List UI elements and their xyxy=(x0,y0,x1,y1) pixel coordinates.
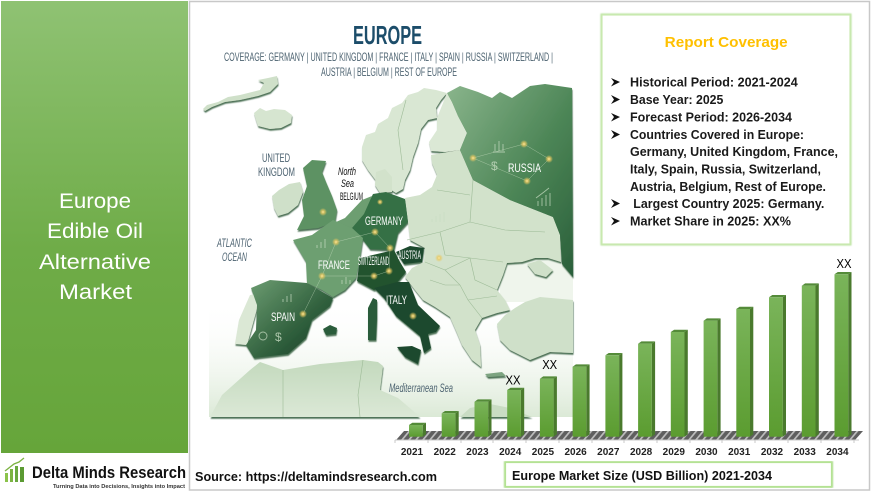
text: coverage subtitle xyxy=(224,50,553,79)
value labels: XX xyxy=(836,257,852,271)
heading: report coverage: Report Coverage xyxy=(665,34,788,51)
map labels: North xyxy=(338,166,356,178)
legend: chart caption box: Europe Market Size (USD Billion) 2021-2034 xyxy=(512,468,773,483)
United Kingdom xyxy=(297,160,337,230)
list: coverage items: Italy, Spain, Russia, Switzerland, xyxy=(630,162,821,176)
list: coverage items: Historical Period: 2021-2024 xyxy=(630,76,798,90)
Sardinia and Corsica xyxy=(368,298,377,340)
heading: market title: Edible Oil xyxy=(47,219,143,243)
Russia xyxy=(447,84,573,277)
panel: report coverage xyxy=(602,15,850,244)
year axis labels: 2032 xyxy=(761,447,784,458)
year axis labels: 2027 xyxy=(597,447,620,458)
list: coverage items: Countries Covered in Europe: xyxy=(630,128,804,142)
North Africa xyxy=(210,360,420,417)
year axis labels: 2030 xyxy=(695,447,718,458)
map labels: GERMANY xyxy=(365,214,403,228)
logo: Delta Minds Research: Turning Data into Decisions, Insights into Impact xyxy=(53,484,185,490)
Austria xyxy=(396,246,424,264)
Turkey xyxy=(497,297,573,360)
list: coverage items: Largest Country 2025: Germany. xyxy=(633,197,824,211)
value labels: XX xyxy=(542,358,558,372)
bar chart: market size 2021-2034 xyxy=(395,257,863,458)
year axis labels: 2033 xyxy=(794,447,816,458)
map labels: KINGDOM xyxy=(258,165,295,179)
value labels xyxy=(506,257,852,388)
glow dots xyxy=(299,140,553,320)
Norway and Sweden xyxy=(362,88,447,193)
Greenland sliver xyxy=(203,76,278,111)
list: coverage items: Forecast Period: 2026-2034 xyxy=(630,110,792,124)
year axis labels: 2031 xyxy=(728,447,751,458)
list: coverage items: Germany, United Kingdom, France, xyxy=(630,145,838,159)
map labels: FRANCE xyxy=(318,258,350,272)
map labels: SWITZERLAND xyxy=(358,254,389,268)
year axis labels: 2026 xyxy=(564,447,587,458)
Portugal xyxy=(235,294,258,345)
Levant shore xyxy=(460,404,532,417)
map labels: RUSSIA xyxy=(508,161,541,175)
icons: list arrow bullets xyxy=(611,78,620,226)
Finland xyxy=(429,93,467,152)
year axis labels: 2022 xyxy=(434,447,456,458)
map labels: UNITED xyxy=(262,151,290,165)
year axis labels: 2024 xyxy=(499,447,522,458)
year axis labels xyxy=(401,447,849,458)
map: Europe xyxy=(203,76,573,417)
list: coverage items: Market Share in 2025: XX% xyxy=(630,214,791,228)
source line: Source: https://deltamindsresearch.com xyxy=(195,469,437,484)
Denmark xyxy=(375,169,392,193)
heading: market title: Alternative xyxy=(39,250,151,274)
map: Europe: $ xyxy=(491,159,498,173)
logo: Delta Minds Research: Delta Minds Research xyxy=(32,464,186,482)
heading: market title xyxy=(39,189,151,304)
text: coverage subtitle: COVERAGE: GERMANY | UNITED KINGDOM | FRANCE | ITALY | SPAIN | RUSSIA | SWITZERLAND | xyxy=(224,50,553,64)
Eastern Europe and Balkans xyxy=(405,150,561,367)
sea tint xyxy=(209,300,573,417)
icon: logo bars and arrow xyxy=(5,458,24,482)
legend: chart caption box xyxy=(506,462,832,486)
Sicily xyxy=(397,346,421,364)
year axis labels: 2034 xyxy=(826,447,849,458)
map icons xyxy=(259,141,550,340)
year axis labels: 2025 xyxy=(532,447,554,458)
map labels xyxy=(216,151,541,395)
Switzerland and north Italy xyxy=(357,250,406,290)
country borders xyxy=(283,100,545,417)
map labels: OCEAN xyxy=(222,250,247,264)
map labels: BELGIUM xyxy=(340,191,363,203)
heading: market title: Market xyxy=(59,280,132,304)
map: Europe: $ xyxy=(275,330,282,344)
map labels: Sea xyxy=(341,178,354,190)
panel: left green title panel xyxy=(1,1,188,453)
network lines xyxy=(303,144,549,314)
Iceland xyxy=(254,108,292,129)
heading: map title EUROPE: EUROPE xyxy=(353,20,422,50)
list: coverage items: Austria, Belgium, Rest of Europe. xyxy=(630,180,826,194)
year axis labels: 2021 xyxy=(401,447,424,458)
year axis labels: 2029 xyxy=(663,447,685,458)
text: coverage subtitle: AUSTRIA | BELGIUM | REST OF EUROPE xyxy=(321,65,457,79)
Spain xyxy=(246,280,333,358)
map labels: ATLANTIC xyxy=(216,236,252,250)
year axis labels: 2023 xyxy=(466,447,489,458)
year axis labels: 2028 xyxy=(630,447,653,458)
list: coverage items: Base Year: 2025 xyxy=(630,93,723,107)
Benelux xyxy=(336,196,372,228)
Germany xyxy=(352,192,408,250)
Ireland xyxy=(272,182,303,216)
list: coverage items xyxy=(630,76,838,228)
map labels: AUSTRIA xyxy=(398,248,421,262)
heading: market title: Europe xyxy=(59,189,131,213)
chart floor xyxy=(396,431,863,440)
bars xyxy=(409,272,852,437)
Crimea xyxy=(527,260,553,277)
Crete xyxy=(485,372,506,377)
logo: Delta Minds Research xyxy=(1,453,188,490)
value labels: XX xyxy=(506,374,521,388)
Italy xyxy=(374,282,440,353)
map labels: Mediterranean Sea xyxy=(389,381,453,395)
map labels: SPAIN xyxy=(271,310,295,324)
France xyxy=(293,220,363,297)
map labels: ITALY xyxy=(386,293,407,307)
